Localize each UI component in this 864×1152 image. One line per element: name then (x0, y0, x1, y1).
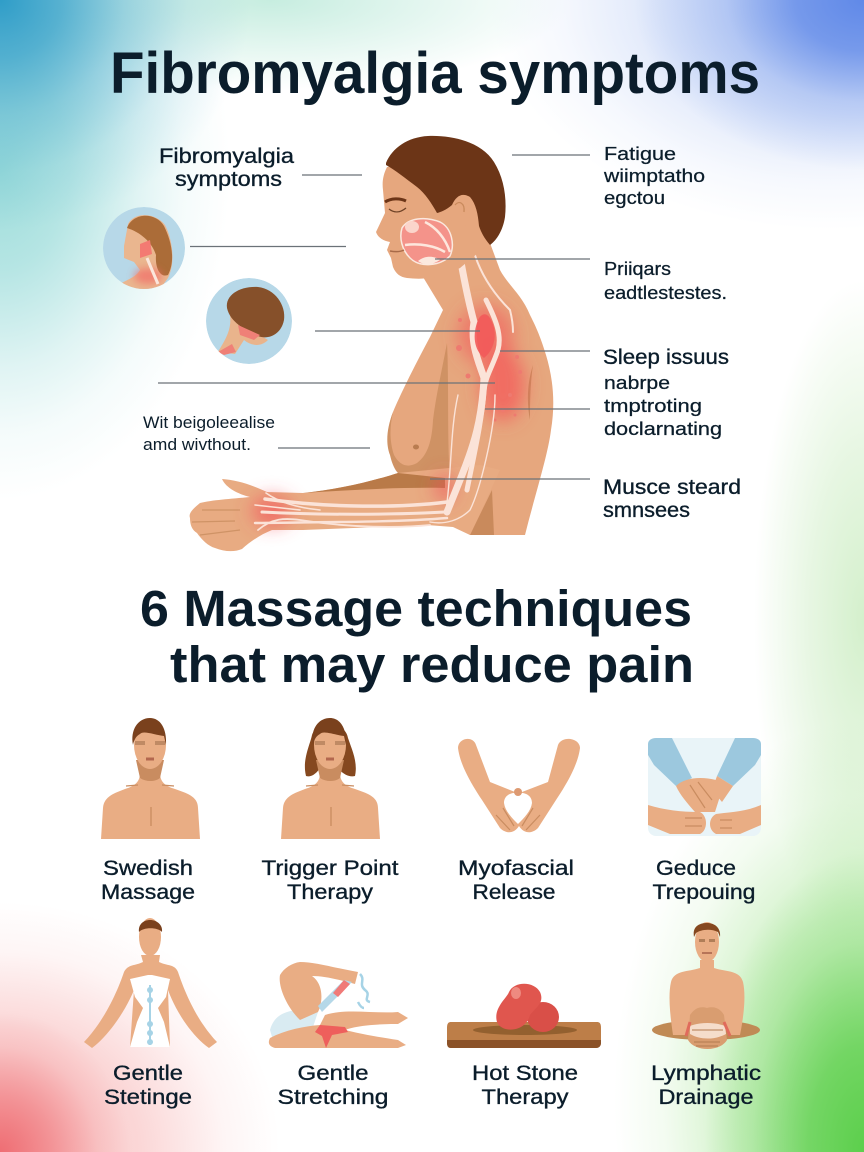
head: face (376, 160, 490, 279)
technique: Gentle Stretching (269, 962, 408, 1109)
red dots (456, 318, 522, 422)
right label: fatigue (603, 144, 705, 208)
right label: second note: Priiqars (604, 259, 671, 279)
right label: muscle: Musce steard (603, 476, 741, 499)
icon: hands forming heart (458, 739, 580, 832)
white nerves arm (255, 233, 513, 530)
icon: red stones on wooden board (447, 984, 601, 1048)
label: Therapy (287, 881, 374, 904)
title: Fibromyalgia symptoms (110, 41, 760, 106)
label: Drainage (658, 1086, 754, 1109)
technique: Lymphatic Drainage (651, 922, 761, 1109)
icon: bust with long hair (281, 718, 380, 839)
technique: Trigger Point Therapy (262, 718, 399, 904)
technique: Myofascial Release (458, 739, 580, 904)
left label: Fibromyalgia symptoms (159, 145, 294, 191)
label (458, 857, 574, 904)
red glows (252, 305, 525, 526)
label: Release (472, 881, 556, 904)
right label: second note (604, 259, 727, 303)
section heading: that may reduce pain (170, 636, 694, 693)
forearm and hand (190, 465, 500, 551)
chest red organ (475, 314, 495, 358)
inset circle: brain and spine (206, 278, 292, 364)
chest shade (387, 343, 450, 478)
icon: bust (101, 718, 200, 839)
label: Gentle (298, 1062, 368, 1085)
label (651, 1062, 761, 1109)
right label: sleep issues: tmptroting (604, 396, 702, 416)
torso (388, 240, 553, 535)
label: Stetinge (104, 1086, 192, 1109)
label (652, 857, 756, 904)
right label: fatigue: egctou (604, 188, 665, 208)
hair (386, 136, 506, 245)
label (104, 1062, 192, 1109)
label: Gentle (113, 1062, 183, 1085)
right label: fatigue: wiimptatho (603, 166, 705, 186)
inset circle: woman's head and neck (103, 207, 185, 289)
technique: Hot Stone Therapy (447, 984, 601, 1109)
anatomy illustration: side-view body (190, 136, 553, 551)
eyebrow and eye (385, 199, 406, 202)
right label: fatigue: Fatigue (604, 144, 676, 164)
lower arm wedge shade (470, 490, 494, 535)
section heading: 6 Massage techniques (140, 580, 692, 637)
left label: lower note: amd wivthout. (143, 435, 251, 454)
label: Trigger Point (262, 857, 399, 880)
technique: Swedish Massage (101, 718, 200, 904)
right label: muscle: smnsees (603, 499, 690, 522)
right label: second note: eadtlestestes. (604, 283, 727, 303)
right label: sleep issues: Sleep issuus (603, 346, 729, 369)
label (472, 1062, 578, 1109)
label: Massage (101, 881, 195, 904)
leader lines (158, 155, 590, 479)
label (101, 857, 195, 904)
left label: Fibromyalgia symptoms: Fibromyalgia (159, 145, 294, 168)
label: Trepouing (652, 881, 756, 904)
left label: lower note: Wit beigoleealise (143, 413, 275, 432)
label: Myofascial (458, 857, 574, 880)
label: Hot Stone (472, 1062, 578, 1085)
section heading (140, 580, 694, 693)
shadow above forearm (303, 473, 445, 493)
label (278, 1062, 388, 1109)
right label: sleep issues: nabrpe (604, 373, 670, 393)
left label: lower note (143, 413, 275, 454)
left label: Fibromyalgia symptoms: symptoms (175, 168, 282, 191)
label: Lymphatic (651, 1062, 761, 1085)
jaw red panel (401, 219, 452, 265)
ear (450, 199, 470, 229)
label (262, 857, 399, 904)
right label: sleep issues: doclarnating (604, 419, 722, 439)
icon: stretching figure (269, 962, 408, 1048)
label: Stretching (278, 1086, 388, 1109)
icon: standing figure with spine (84, 918, 217, 1048)
label: Swedish (103, 857, 193, 880)
label: Therapy (482, 1086, 569, 1109)
icon: therapist hands on back (648, 738, 761, 836)
icon: seated figure with hands on abdomen (652, 922, 760, 1049)
right label: sleep issues (603, 346, 729, 439)
technique: Gentle Stetinge (84, 918, 217, 1109)
technique: Geduce Trepouing (648, 738, 761, 904)
right label: muscle (603, 476, 741, 522)
finger creases (192, 510, 240, 535)
label: Geduce (656, 857, 736, 880)
